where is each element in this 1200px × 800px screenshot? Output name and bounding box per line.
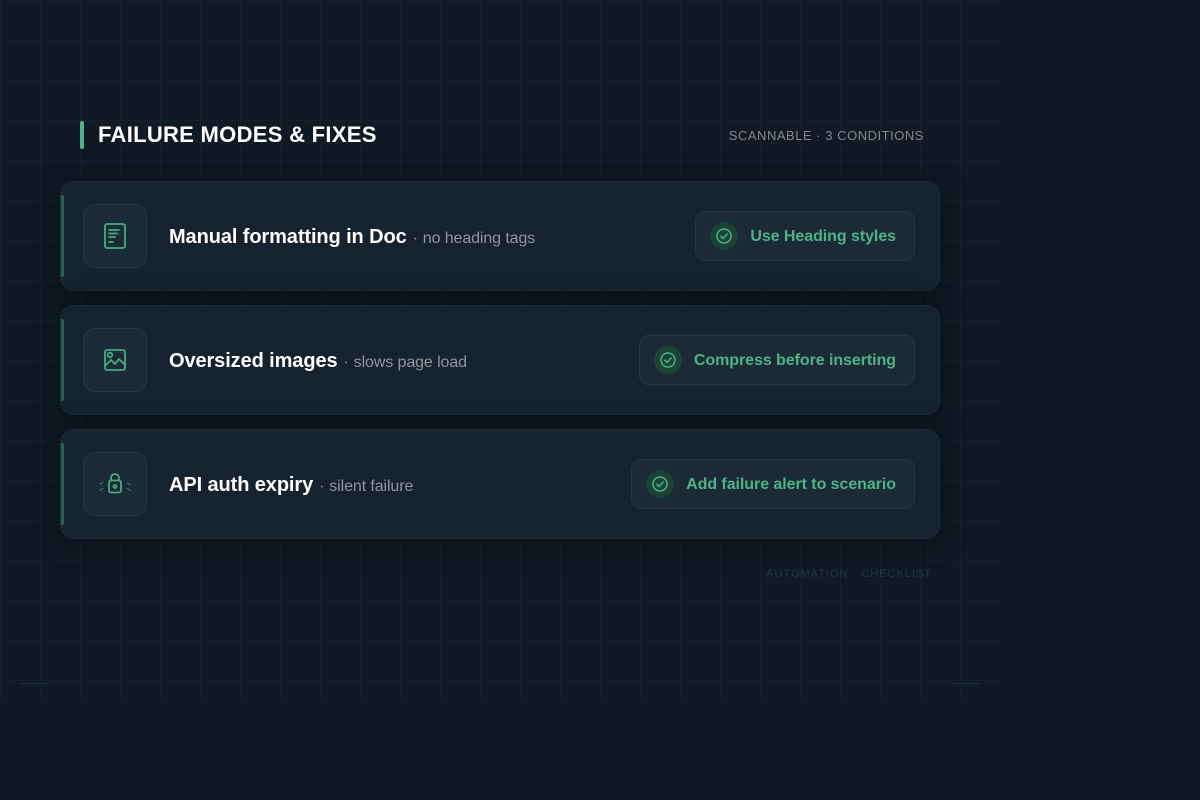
fix chip: use heading styles: Use Heading styles (750, 228, 896, 245)
panel: oversized images card (60, 305, 940, 415)
text: api auth: API auth expiry · silent failure (169, 474, 413, 496)
fix chip: failure alert: Add failure alert to scenario (686, 476, 896, 493)
footer label: AUTOMATION · CHECKLIST (766, 568, 932, 580)
fix chip: compress (639, 335, 915, 385)
icon: padlock (83, 452, 147, 516)
fix chip: compress: Compress before inserting (694, 352, 896, 369)
icon: image (83, 328, 147, 392)
panel: manual formatting card (60, 181, 940, 291)
fix chip: use heading styles (695, 211, 915, 261)
text: manual formatting: Manual formatting in Doc · no heading tags (169, 226, 535, 248)
title: FAILURE MODES & FIXES (98, 122, 377, 147)
icon: document (83, 204, 147, 268)
text: oversized images: Oversized images · slows page load (169, 350, 467, 372)
panel: api auth card (60, 429, 940, 539)
title accent bar (80, 121, 84, 149)
subtitle: SCANNABLE · 3 CONDITIONS (729, 128, 924, 143)
fix chip: failure alert (631, 459, 915, 509)
